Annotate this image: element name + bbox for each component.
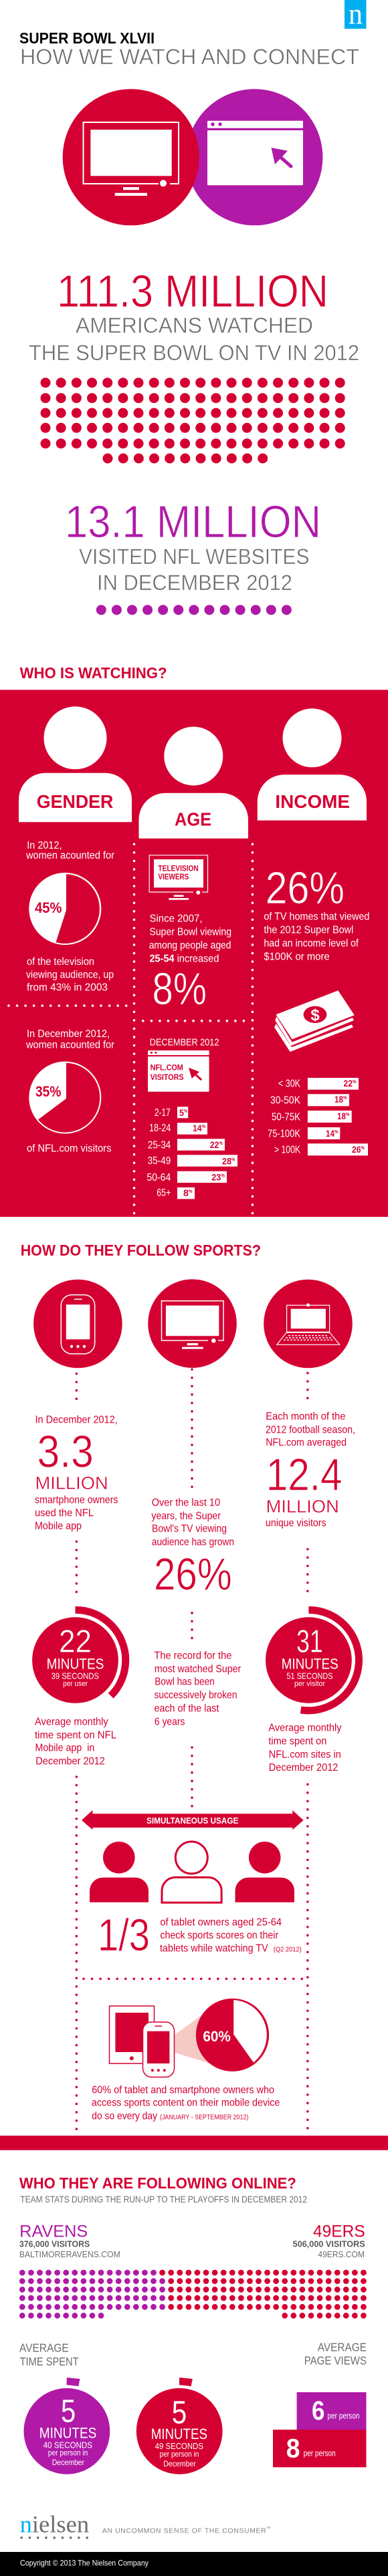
text: mobile time spent: December 2012 [35,1755,105,1767]
stopwatch: Ravens time spent [24,2378,110,2474]
text: women TV share detail [26,956,114,994]
icon: money stack: $ [310,1006,320,1024]
bar chart: NFL.com visitors by age: 14 [193,1123,202,1133]
text: site time spent: December 2012 [269,1762,338,1773]
stat: 13.1 million: VISITED NFL WEBSITES [79,545,309,569]
heading: who they are following online: WHO THEY ARE FOLLOWING ONLINE? [19,2174,296,2192]
text: mobile app stat [35,1414,118,1532]
stat boxes: page views per person [273,2392,367,2467]
bar chart: NFL.com visitors by age: % [219,1141,223,1146]
text: mobile app stat: Mobile app [35,1520,82,1532]
timer: 31 minutes: 31 [296,1624,323,1660]
text: 60% daily sports access: access sports content on their mobile device [92,2098,280,2109]
bar chart: income levels: % [361,1146,365,1151]
arrow: simultaneous usage [82,1810,304,1830]
timer: 22 minutes: 22 [59,1624,92,1660]
bar chart: NFL.com visitors by age: 28 [222,1155,231,1166]
text: mobile app stat: In December 2012, [35,1414,118,1425]
team: 49ers: 506,000 VISITORS [293,2240,365,2249]
stopwatch: 49ers time spent [136,2378,223,2474]
bar chart: NFL.com visitors by age: 65+ [157,1187,171,1199]
label: average page views: AVERAGE [318,2341,367,2354]
stopwatch: 49ers time spent: 49 SECONDS [155,2441,203,2451]
bar chart: income levels: 18 [334,1094,343,1105]
bar chart: income levels: % [343,1096,347,1101]
bar chart: NFL.com visitors by age [147,1107,237,1199]
person: age [138,727,248,839]
bar chart: NFL.com visitors by age: % [221,1174,225,1179]
stat boxes: page views per person: per person [304,2448,336,2458]
label: average time spent: TIME SPENT [20,2355,79,2368]
text: 60% daily sports access: (JANUARY - SEPTEMBER 2012) [160,2113,248,2121]
timer: 22 minutes: MINUTES [47,1655,104,1672]
dotted connectors: sports columns [76,1369,308,2130]
text: age TV viewing [149,913,231,1014]
text: mobile time spent: time spent on NFL [35,1730,116,1741]
team: Ravens [19,2222,120,2259]
timer: 22 minutes: 39 SECONDS [52,1671,99,1681]
bar chart: NFL.com visitors by age: 8 [183,1187,189,1198]
text: TV audience growth stat [151,1497,234,1600]
text: 26% income stat: of TV homes that viewed [264,911,369,923]
text: TV audience growth stat: audience has grown [152,1537,234,1548]
person: gender: GENDER [37,791,114,812]
text: mobile app stat: smartphone owners [35,1494,118,1506]
bar chart: income levels: 22 [344,1078,353,1089]
text: TV audience growth stat: years, the Super [151,1510,221,1522]
person: income: INCOME [275,791,350,812]
pie chart: 45% [29,873,101,945]
team: 49ers: 49ERS [313,2222,365,2241]
icon: laptop circle [264,1280,353,1368]
stat: 13.1 million: IN DECEMBER 2012 [97,571,292,595]
bar chart: income levels: 30-50K [270,1095,301,1106]
stat boxes: page views per person: per person [328,2410,360,2420]
dot grid: team visitors comparison [22,2273,364,2315]
text: site time spent: Average monthly [268,1723,341,1734]
bar chart: income levels: < 30K [278,1078,301,1089]
text: women TV share detail: viewing audience, up [26,969,114,980]
text: mobile app stat: used the NFL [35,1508,94,1519]
text: mobile app stat: MILLION [35,1473,108,1493]
pie chart: 45%: 45% [35,899,62,916]
team: 49ers: 49ERS.COM [318,2249,365,2259]
text: 60% daily sports access [92,2084,280,2122]
text: TV audience growth stat: Bowl's TV viewing [152,1524,227,1535]
timer: 31 minutes: MINUTES [282,1655,338,1672]
icon: three people, one highlighted [90,1842,294,1902]
text: unique visitors stat: 2012 football season, [266,1424,355,1435]
text: women TV share intro [25,840,115,861]
stopwatch: 49ers time spent: MINUTES [151,2426,207,2442]
text: unique visitors stat [266,1411,355,1529]
bar chart: income levels: 18 [337,1111,346,1121]
pie chart: 35% [29,1061,101,1133]
tagline: TM [266,2526,271,2529]
stopwatch: 49ers time spent: per person in [160,2449,199,2458]
timer: 22 minutes: per user [63,1680,88,1688]
timer: 22 minutes [32,1610,126,1703]
icon: television viewers: VIEWERS [158,873,189,881]
stat: 13.1 million [65,496,321,595]
text: 60% daily sports access: 60% of tablet and smartphone owners who [92,2084,274,2096]
text: mobile app stat: 3.3 [37,1427,94,1477]
bar chart: income levels: > 100K [274,1145,301,1156]
icon: money stack [274,990,355,1052]
dot row: purple web visitors [101,605,287,615]
bar chart: NFL.com visitors by age: % [189,1189,193,1194]
bar chart: income levels: % [334,1130,338,1135]
text: 26% income stat [264,863,369,963]
icon: NFL.com visitors browser [148,1036,219,1092]
team: Ravens: BALTIMORERAVENS.COM [19,2249,120,2259]
person: age: AGE [175,809,211,830]
icon: tablet and smartphone with 60% pie: 60% [203,2028,231,2045]
pie chart: 35%: 35% [35,1083,61,1100]
text: unique visitors stat: MILLION [266,1496,339,1516]
stopwatch: Ravens time spent: per person in [48,2448,88,2457]
text: most watched record: 6 years [155,1717,185,1728]
text: most watched record: each of the last [154,1703,219,1715]
icon: television viewers: TELEVISION [158,865,199,873]
text: 26% income stat: had an income level of [264,938,359,950]
text: age TV viewing: Since 2007, [150,913,202,924]
text: most watched record: successively broken [154,1690,237,1701]
bar chart: NFL.com visitors by age: 23 [211,1172,221,1183]
text: NFL.com visitors: of NFL.com visitors [27,1143,111,1154]
text: unique visitors stat: unique visitors [266,1518,326,1529]
icon: tablet and smartphone with 60% pie [110,1999,269,2077]
stat: 111.3 million: 111.3 MILLION [57,266,328,317]
stat: 111.3 million [29,266,359,365]
timer: 31 minutes: per visitor [294,1680,325,1688]
stat: one third of tablet owners: of tablet owners aged 25-64 [160,1917,282,1928]
icon: NFL.com visitors browser: VISITORS [151,1074,184,1082]
icon: television viewers [149,855,207,900]
bar chart: income levels: % [346,1113,350,1117]
icon: television in red circle [63,89,199,225]
label: average page views [304,2341,367,2368]
stopwatch: Ravens time spent: 5 [61,2394,76,2430]
bar chart: NFL.com visitors by age: 35-49 [147,1155,171,1167]
bar chart: NFL.com visitors by age: 22 [210,1139,219,1150]
stopwatch: Ravens time spent: 40 SECONDS [43,2440,92,2450]
bar chart: NFL.com visitors by age: 25-34 [148,1139,171,1151]
bar chart: income levels: % [353,1080,357,1085]
text: women TV share intro: women acounted for [25,850,115,861]
stopwatch: Ravens time spent: December [52,2458,84,2467]
bar chart: NFL.com visitors by age: % [202,1125,206,1129]
text: unique visitors stat: NFL.com averaged [266,1437,347,1448]
person: gender [19,706,132,822]
bar chart: NFL.com visitors by age: % [184,1109,188,1114]
text: age TV viewing: 25-54 increased [150,953,219,964]
text: women NFL.com share intro: women acounted for [25,1039,115,1050]
text: age TV viewing: 8% [153,964,207,1014]
icon: browser in purple circle [186,89,322,225]
logo: Nielsen wordmark: nielsen [20,2511,89,2537]
bar chart: NFL.com visitors by age: 5 [179,1107,184,1118]
bar chart: income levels: 50-75K [272,1111,301,1123]
text: most watched record: most watched Super [155,1664,241,1675]
bar chart: NFL.com visitors by age: 50-64 [147,1172,171,1183]
text: age TV viewing: among people aged [149,940,231,951]
text: women TV share detail: from 43% in 2003 [27,982,108,994]
text: women NFL.com share intro [25,1028,115,1050]
text: most watched record: Bowl has been [155,1677,215,1688]
icon: television circle [148,1279,237,1368]
heading: who they are following online [19,2174,307,2204]
bar chart: income levels: 26 [352,1144,361,1155]
stat: one third of tablet owners: tablets while watching TV [160,1943,268,1955]
icon: NFL.com visitors browser: DECEMBER 2012 [150,1036,219,1048]
bar chart: income levels: 75-100K [268,1128,301,1139]
text: most watched record [154,1651,241,1728]
title: HOW WE WATCH AND CONNECT [20,45,359,69]
text: women TV share detail: of the television [27,956,94,968]
footer: copyright bar [0,2552,388,2576]
stat boxes: page views per person: 6 [312,2396,324,2426]
text: women TV share intro: In 2012, [27,840,62,851]
text: site time spent: NFL.com sites in [269,1749,341,1760]
timer: 31 minutes: 51 SECONDS [286,1671,333,1681]
stat: one third of tablet owners: 1/3 [98,1910,150,1961]
stat: 111.3 million: THE SUPER BOWL ON TV IN 2012 [29,341,359,365]
heading: who they are following online: TEAM STATS DURING THE RUN-UP TO THE PLAYOFFS IN DECEMBER 2012 [20,2194,307,2204]
text: site time spent [268,1723,341,1773]
icon: smartphone circle [33,1280,122,1368]
team: Ravens: RAVENS [19,2222,88,2241]
text: 26% income stat: $100K or more [264,952,330,963]
person: income [258,708,367,821]
stat: one third of tablet owners: (Q2 2012) [274,1945,302,1953]
footer: copyright bar: Copyright © 2013 The Nielsen Company [20,2558,149,2567]
bar chart: income levels [268,1078,368,1156]
title: SUPER BOWL XLVII [19,29,155,47]
text: mobile time spent: Mobile app in [35,1743,94,1754]
divider band [0,2136,388,2150]
team: Ravens: 376,000 VISITORS [19,2240,90,2249]
stat boxes: page views per person: 8 [286,2434,300,2464]
text: site time spent: time spent on [268,1736,326,1747]
text: unique visitors stat: Each month of the [266,1411,346,1422]
stopwatch: 49ers time spent: December [163,2459,196,2468]
bar chart: NFL.com visitors by age: 18-24 [149,1123,171,1134]
text: most watched record: The record for the [154,1651,231,1662]
heading: how do they follow sports: HOW DO THEY FOLLOW SPORTS? [21,1242,261,1259]
text: TV audience growth stat: 26% [154,1549,232,1600]
text: 26% income stat: 26% [266,863,345,913]
tagline: AN UNCOMMON SENSE OF THE CONSUMER [102,2527,266,2535]
dot grid: red TV viewers [45,383,340,458]
label: average time spent [19,2341,79,2368]
timer: 31 minutes [266,1610,359,1711]
title [19,29,359,69]
team: 49ers [293,2222,365,2259]
bar chart: NFL.com visitors by age: 2-17 [155,1107,171,1119]
icon: NFL.com visitors browser: NFL.COM [151,1064,183,1072]
arrow: simultaneous usage: SIMULTANEOUS USAGE [147,1816,238,1826]
text: mobile time spent: Average monthly [35,1717,108,1728]
text: age TV viewing: Super Bowl viewing [150,926,231,938]
text: women NFL.com share intro: In December 2012, [27,1028,110,1040]
panel: who is watching [0,690,388,1217]
stopwatch: 49ers time spent: 5 [172,2396,187,2431]
bar chart: income levels: 14 [326,1128,334,1139]
text: TV audience growth stat: Over the last 10 [152,1497,220,1508]
stopwatch: Ravens time spent: MINUTES [39,2424,96,2441]
text: mobile time spent [35,1717,116,1767]
text: 60% daily sports access: do so every day [92,2110,157,2122]
text: 26% income stat: the 2012 Super Bowl [264,925,353,936]
logo: Nielsen n badge [345,0,367,31]
stat: 13.1 million: 13.1 MILLION [65,496,321,547]
stat: 111.3 million: AMERICANS WATCHED [76,313,313,337]
bar chart: NFL.com visitors by age: % [231,1157,235,1162]
stat: one third of tablet owners: check sports scores on their [160,1930,279,1941]
heading: who is watching: WHO IS WATCHING? [20,664,167,682]
label: average time spent: AVERAGE [19,2341,69,2354]
stat: one third of tablet owners [98,1910,302,1961]
text: unique visitors stat: 12.4 [266,1449,343,1500]
label: average page views: PAGE VIEWS [304,2354,367,2368]
